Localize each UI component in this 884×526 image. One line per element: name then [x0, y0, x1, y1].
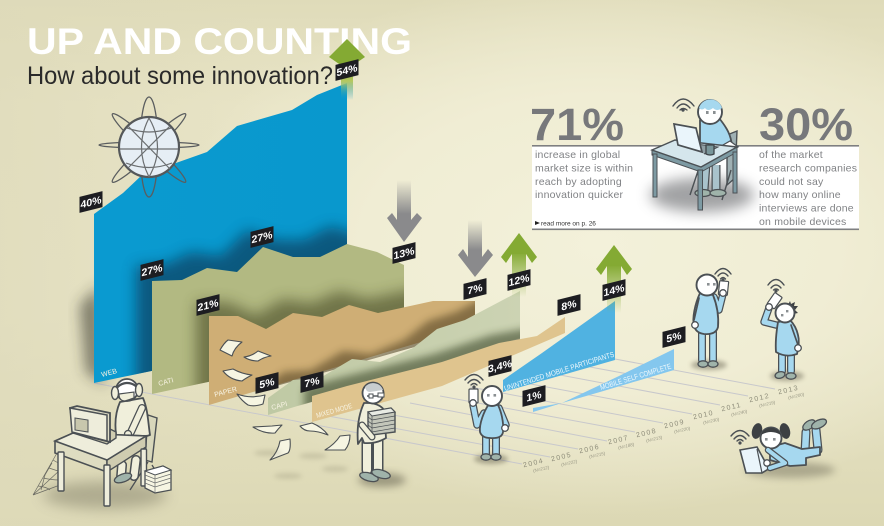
paper stack	[145, 466, 171, 493]
timeline year labels: (N=215)	[589, 451, 606, 459]
badge: 8%	[558, 294, 580, 316]
text: 71% description: reach by adopting	[535, 176, 622, 188]
figure: person at laptop on table	[650, 99, 754, 212]
timeline year labels: (N=200)	[788, 392, 805, 400]
icon: wifi	[768, 280, 784, 292]
floating sheets of paper	[220, 340, 350, 460]
timeline year labels: 2011	[721, 402, 743, 413]
badge: 13%: 13%	[393, 245, 415, 262]
label: capi: CAPI	[271, 401, 288, 412]
title: UP AND COUNTING	[27, 21, 412, 62]
timeline year labels: 2007	[608, 435, 630, 446]
area band: capi	[268, 291, 520, 415]
figure: man carrying paper stack	[358, 382, 406, 487]
shadow: paper band on cati	[188, 282, 404, 386]
timeline year labels: (N=222)	[561, 459, 578, 467]
figure: girl lying down with laptop	[731, 417, 835, 478]
icon: wifi	[465, 374, 483, 388]
timeline year labels: (N=188)	[618, 442, 635, 450]
badge: 3,4%: 3,4%	[488, 358, 512, 376]
area band: paper	[209, 301, 475, 405]
text: 71% description: innovation quicker	[535, 189, 624, 201]
text: 30% description: of the market	[759, 149, 823, 161]
area band: cati	[152, 244, 404, 394]
arrow: web up	[329, 39, 365, 100]
text: 30% description: could not say	[759, 176, 824, 188]
badge: 1%: 1%	[526, 389, 542, 405]
text: 30% description: how many online	[759, 189, 841, 201]
badge: 7% paper end	[464, 278, 486, 300]
label: mobile self complete: MOBILE SELF COMPLETE	[599, 362, 672, 392]
floor timeline grid lines	[94, 359, 775, 464]
timeline year labels: (N=219)	[759, 400, 776, 408]
timeline year labels: 2009	[664, 419, 686, 430]
text: 71% description: market size is within	[535, 162, 633, 174]
label: paper: PAPER	[214, 386, 238, 399]
timeline year labels: (N=240)	[731, 409, 748, 417]
figure: researcher with headset at desk	[33, 379, 171, 509]
badge: 21%: 21%	[197, 297, 219, 314]
timeline year labels: 2006	[579, 444, 601, 455]
timeline year labels: 2005	[551, 452, 573, 463]
figure: person with phone, foreground	[465, 374, 508, 464]
arrow: capi up	[501, 233, 537, 297]
text: 30% description: on mobile devices	[759, 216, 846, 228]
badge: 5% capi	[256, 372, 278, 394]
badge: 7% mixed mode: 7%	[304, 375, 320, 391]
text panel: statistics	[530, 99, 859, 230]
read more note: read more on p. 26	[541, 220, 596, 228]
text: 30% description: interviews are done	[759, 202, 854, 214]
badge: 14%: 14%	[603, 282, 625, 299]
figure: tall person with phone	[691, 268, 731, 370]
area band: unintended mobile participants	[503, 301, 615, 393]
badge: 27% cati start: 27%	[141, 262, 163, 279]
badge: 7% mixed mode	[300, 371, 324, 393]
shadow: web band on backdrop	[80, 285, 104, 385]
label: web: WEB	[101, 368, 118, 379]
badge: 5% capi: 5%	[259, 376, 275, 392]
badge: 1%	[522, 385, 546, 407]
arrow: paper down	[458, 220, 493, 277]
figure: boy looking up at phone	[764, 280, 804, 381]
text: 71% description: increase in global	[535, 149, 620, 161]
icon: wifi	[673, 99, 694, 111]
shadow: mixed mode band on capi	[299, 324, 520, 406]
paper shadows	[254, 450, 348, 479]
text: 30% description: research companies	[759, 162, 857, 174]
stat: 30%: 30%	[759, 99, 853, 150]
timeline year labels: 2012	[749, 393, 771, 404]
icon: wifi	[715, 268, 731, 281]
badge: 54%: 54%	[336, 62, 358, 79]
area band: web	[94, 83, 347, 383]
timeline year labels: (N=230)	[703, 417, 720, 425]
badge: 7% paper end: 7%	[467, 282, 483, 298]
subtitle: How about some innovation?	[27, 62, 333, 90]
icon: wifi	[731, 430, 749, 444]
timeline year labels	[523, 384, 805, 475]
timeline year labels: (N=213)	[646, 435, 663, 443]
badge: 40%: 40%	[80, 194, 102, 211]
arrow: cati down	[387, 180, 422, 242]
shadow: capi band on paper	[254, 301, 475, 392]
shadow: cati band on web	[128, 220, 347, 376]
timeline year labels: 2013	[778, 385, 800, 396]
timeline year labels: 2004	[523, 458, 545, 469]
timeline year labels: 2010	[693, 410, 715, 421]
badge: 8%: 8%	[561, 298, 577, 314]
label: mixed mode: MIXED MODE	[316, 403, 353, 420]
timeline year labels: (N=212)	[533, 465, 550, 473]
arrow: unintended mobile up	[596, 245, 632, 313]
icon: globe	[99, 97, 199, 197]
label: cati: CATI	[158, 377, 174, 388]
label: unintended mobile participants: UNINTENDED MOBILE PARTICIPANTS	[503, 350, 615, 393]
timeline year labels: (N=220)	[674, 426, 691, 434]
area band: mobile self complete	[533, 349, 674, 412]
badge: 5% self complete: 5%	[666, 330, 682, 346]
spider web	[33, 453, 60, 495]
badge: 5% self complete	[662, 326, 686, 348]
area band: mixed mode	[312, 317, 565, 422]
timeline year labels: 2008	[636, 428, 658, 439]
badge: 27% cati peak: 27%	[251, 229, 273, 246]
badge: 12%: 12%	[508, 272, 530, 289]
stat: 71%: 71%	[530, 99, 624, 150]
